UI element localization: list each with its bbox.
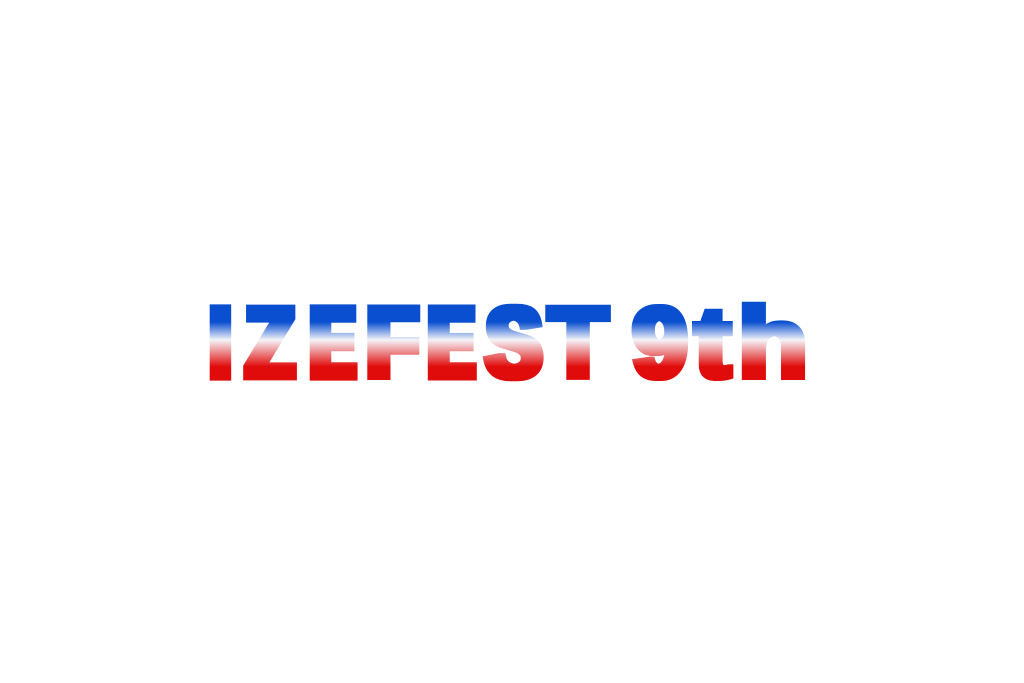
title: IZEFEST 9th: t bbox=[696, 288, 730, 399]
title: IZEFEST 9th: E bbox=[312, 286, 354, 399]
title: IZEFEST 9th: Z bbox=[246, 286, 294, 398]
title: IZEFEST 9th: h bbox=[738, 287, 808, 398]
title: IZEFEST 9th: 9 bbox=[633, 286, 687, 398]
title: IZEFEST 9th bbox=[212, 286, 808, 399]
title: IZEFEST 9th: E bbox=[430, 287, 473, 398]
title: IZEFEST 9th: T bbox=[549, 287, 607, 399]
title: IZEFEST 9th: F bbox=[368, 287, 418, 399]
title: IZEFEST 9th: I bbox=[212, 287, 229, 399]
title: IZEFEST 9th: S bbox=[486, 287, 541, 399]
